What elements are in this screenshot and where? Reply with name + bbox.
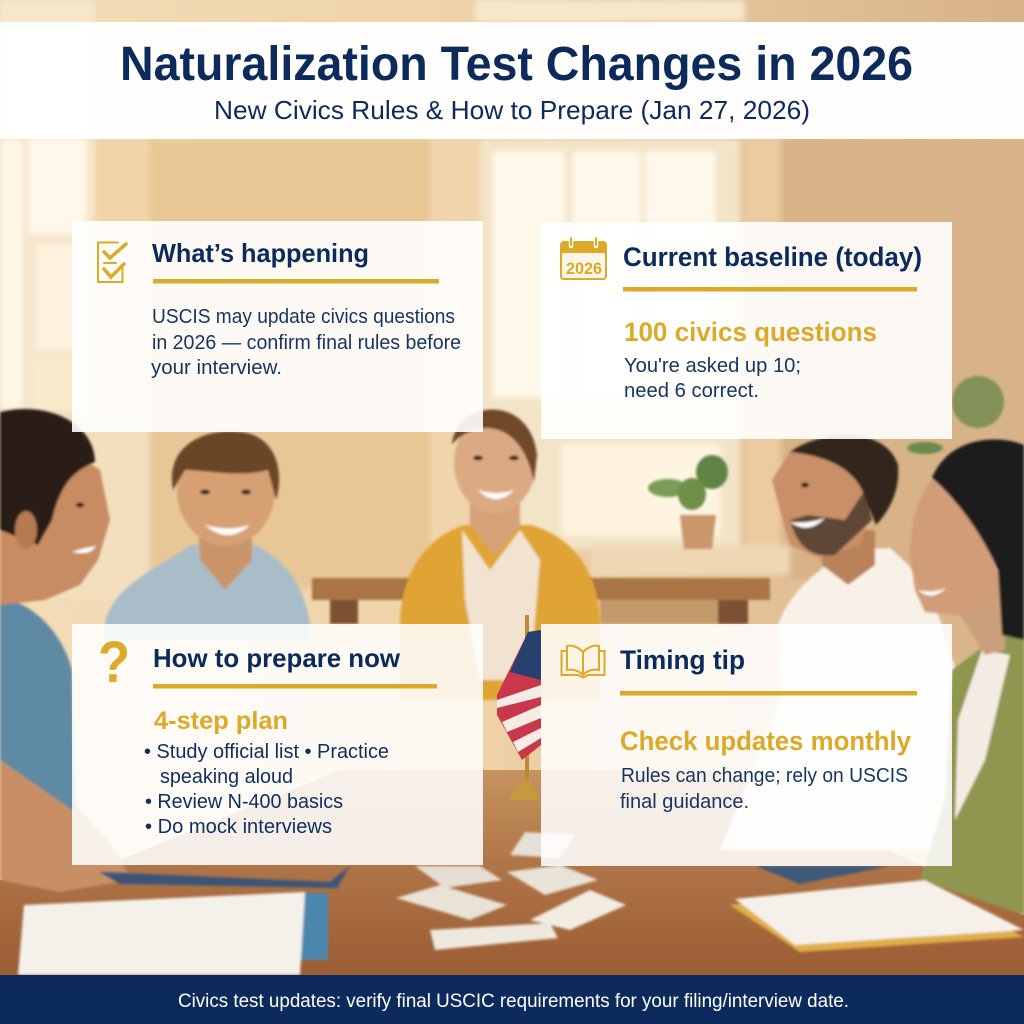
footer band [0,975,1024,1024]
potted plant [648,455,728,549]
icon: checklist [98,242,126,282]
person: woman on the right [910,440,1024,915]
panel: current baseline [541,222,952,439]
person: bearded man in white shirt [720,435,960,850]
body text [151,306,461,379]
body text: in 2026 — confirm final rules before [152,332,461,354]
title band [0,22,1024,139]
body text: Rules can change; rely on USCIS [621,765,908,787]
subtitle: New Civics Rules & How to Prepare (Jan 27, 2026) [214,95,810,125]
heading: Timing tip [620,645,745,675]
heading: What’s happening [152,238,369,268]
wall plant [907,376,1004,454]
person: man on the left [0,409,130,892]
step list: • Study official list • Practice [144,741,389,763]
footer band: Civics test updates: verify final USCIC requirements for your filing/interview date. [178,991,849,1012]
main table [0,770,1024,980]
panel: what's happening [72,221,483,432]
heading: Current baseline (today) [623,242,922,272]
panel: timing tip [541,624,952,866]
heading: How to prepare now [153,643,401,673]
icon: open book [562,646,604,678]
key figure: 100 civics questions [624,317,877,347]
binder and papers at the bottom [18,832,1024,975]
step list: speaking aloud [160,766,293,788]
person: woman in yellow cardigan [400,409,600,700]
icon: calendar 2026 [561,238,606,279]
icon: question mark: ? [98,630,130,695]
title: Naturalization Test Changes in 2026 [120,38,913,91]
key figure: 4-step plan [154,707,288,735]
body text: You're asked up 10; [624,355,801,377]
body text [624,355,801,402]
body text: USCIS may update civics questions [152,306,455,328]
person: man in grey polo [105,431,310,640]
body text: final guidance. [620,791,749,813]
icon: calendar 2026: 2026 [566,259,602,278]
back table [312,578,770,624]
step list [144,741,389,838]
desk flag [497,615,541,800]
body text [620,765,908,813]
key figure: Check updates monthly [620,726,911,756]
step list: • Review N-400 basics [145,791,343,813]
body text: need 6 correct. [624,380,759,402]
step list: • Do mock interviews [145,816,332,838]
body text: your interview. [151,357,282,379]
panel: how to prepare [72,624,483,865]
